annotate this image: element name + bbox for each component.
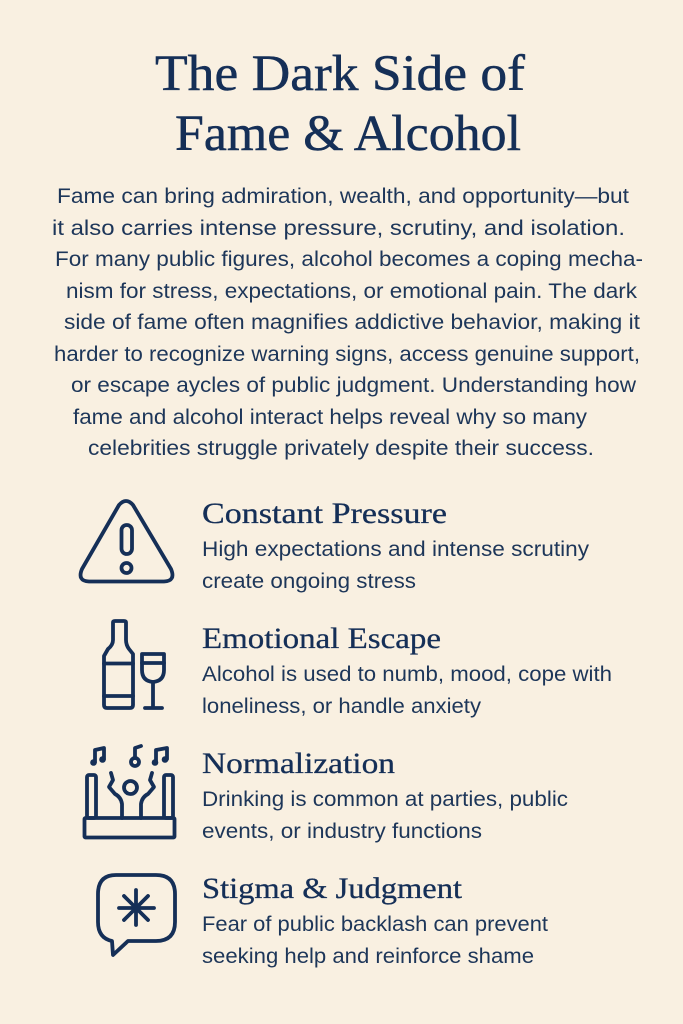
- item: stigma and judgment: Fear of public backlash can prevent: [202, 912, 548, 936]
- item: emotional escape: Alcohol is used to numb, mood, cope with: [202, 662, 612, 686]
- intro paragraph: For many public figures, alcohol becomes a coping mecha-: [55, 247, 643, 271]
- item: emotional escape: Emotional Escape: [202, 622, 441, 655]
- intro paragraph: harder to recognize warning signs, access genuine support,: [54, 342, 640, 366]
- intro paragraph: Fame can bring admiration, wealth, and opportunity—but: [57, 184, 629, 208]
- title: The Dark Side of: [155, 46, 525, 102]
- title: Fame & Alcohol: [175, 106, 521, 162]
- item: stigma and judgment: seeking help and reinforce shame: [202, 944, 534, 968]
- intro paragraph: nism for stress, expectations, or emotional pain. The dark: [66, 279, 637, 303]
- intro paragraph: fame and alcohol interact helps reveal why so many: [73, 405, 587, 429]
- item: constant pressure: create ongoing stress: [202, 569, 416, 593]
- icon: party and music notes: [84, 746, 174, 838]
- icon: bottle and wine glass: [104, 621, 164, 708]
- intro paragraph: side of fame often magnifies addictive behavior, making it: [64, 310, 640, 334]
- item: normalization: [202, 747, 568, 843]
- intro paragraph: [52, 184, 643, 460]
- item: constant pressure: [202, 497, 589, 593]
- item: normalization: events, or industry functions: [202, 819, 482, 843]
- title: [155, 46, 525, 162]
- intro paragraph: or escape aycles of public judgment. Understanding how: [71, 373, 636, 397]
- intro paragraph: it also carries intense pressure, scrutiny, and isolation.: [52, 216, 625, 240]
- intro paragraph: celebrities struggle privately despite their success.: [88, 436, 594, 460]
- item: constant pressure: Constant Pressure: [202, 497, 447, 530]
- item: normalization: Drinking is common at parties, public: [202, 787, 568, 811]
- item: stigma and judgment: [202, 872, 548, 968]
- item: emotional escape: loneliness, or handle anxiety: [202, 694, 481, 718]
- icon: warning triangle: [81, 501, 172, 582]
- item: stigma and judgment: Stigma & Judgment: [202, 872, 463, 905]
- item: constant pressure: High expectations and intense scrutiny: [202, 537, 589, 561]
- item: emotional escape: [202, 622, 612, 718]
- item: normalization: Normalization: [202, 747, 395, 780]
- icon: speech bubble with asterisk: [98, 875, 175, 955]
